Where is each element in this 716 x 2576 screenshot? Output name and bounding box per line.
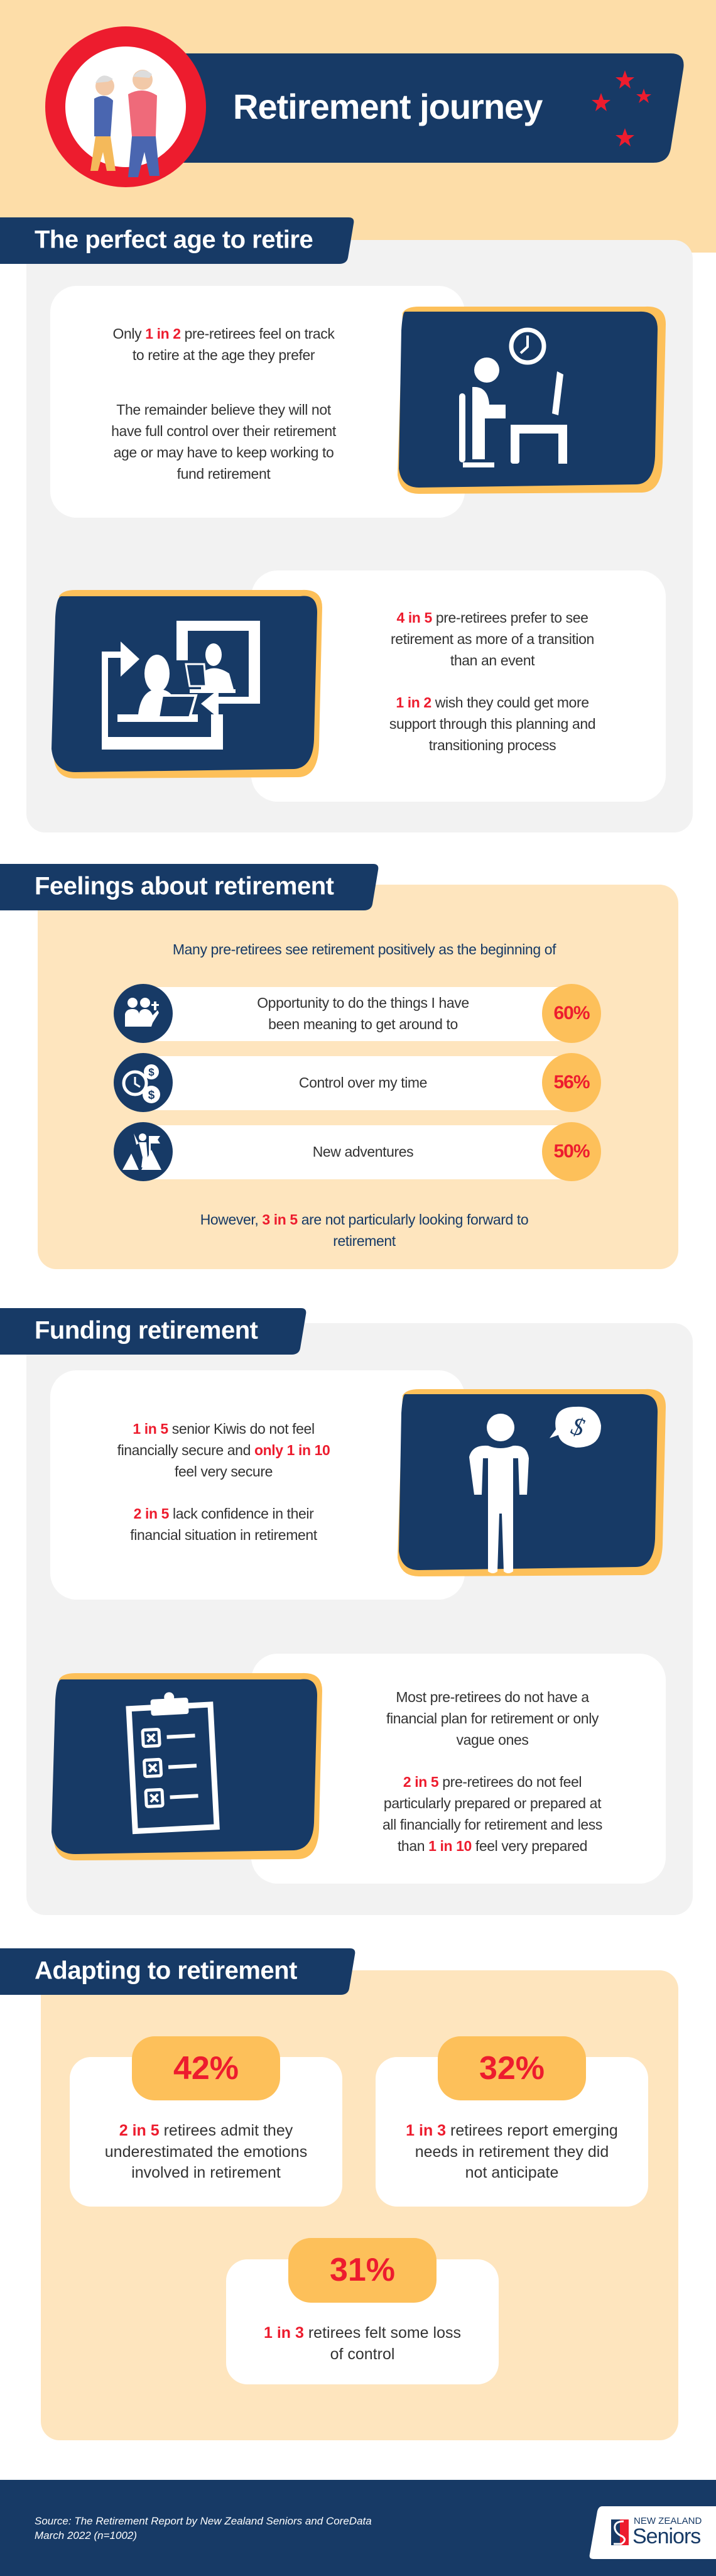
- icon: couple walking in red ring: [45, 26, 206, 187]
- text: remainder: fund retirement: [177, 466, 270, 482]
- text: remainder: The remainder believe they will not: [116, 401, 331, 418]
- panel: the perfect age to retire: [26, 240, 693, 832]
- text: 2 in 5 not prepared: [382, 1774, 602, 1854]
- heading: feelings about retirement: Feelings about retirement: [35, 873, 334, 900]
- icon: person with empty pockets: [398, 1389, 666, 1576]
- text: opportunity: Opportunity to do the things I have: [257, 995, 469, 1011]
- badge: 42%: [132, 2036, 280, 2100]
- card: 31% loss of control: [226, 2238, 499, 2384]
- text: most pre-retirees: Most pre-retirees do not have a: [396, 1689, 589, 1705]
- panel: adapting to retirement: [41, 1970, 678, 2440]
- text: 2 in 5 lack confidence: [130, 1505, 317, 1543]
- badge: 60%: [542, 984, 601, 1043]
- text: opportunity: been meaning to get around to: [268, 1016, 458, 1032]
- text: 1 in 3 emerging needs: [406, 2122, 618, 2181]
- text: transition: than an event: [450, 652, 534, 669]
- text: on track: [113, 325, 335, 363]
- badge: 50%: 50%: [553, 1141, 590, 1162]
- card: 42% emotions: [70, 2036, 342, 2207]
- text: support: transitioning process: [429, 737, 556, 753]
- logo: new zealand seniors: [589, 2506, 716, 2559]
- card: financial plan: [251, 1654, 666, 1884]
- heading: adapting to retirement: [0, 1948, 355, 1995]
- text: new adventures: New adventures: [313, 1143, 413, 1160]
- badge: 42%: 42%: [173, 2050, 239, 2087]
- icon: clock and coins: $: [148, 1089, 155, 1102]
- text: 1 in 3 emerging needs: needs in retirement they did: [415, 2142, 609, 2160]
- row: opportunity 60%: [114, 984, 601, 1043]
- text: transition: [391, 609, 594, 669]
- badge: 31%: [288, 2238, 437, 2303]
- text: support: 1 in 2 wish they could get more: [396, 694, 589, 711]
- text: 1 in 5: feel very secure: [175, 1463, 273, 1480]
- footer: [0, 2480, 716, 2576]
- icon: people: [114, 984, 173, 1043]
- icon: clock and coins: $: [148, 1066, 155, 1078]
- text: most pre-retirees: financial plan for retirement or only: [386, 1710, 599, 1727]
- icon: stars: [592, 70, 651, 146]
- badge: 50%: [542, 1122, 601, 1181]
- logo: new zealand seniors: NEW ZEALAND: [634, 2516, 702, 2526]
- text: 1 in 3 loss of control: 1 in 3 retirees felt some loss: [264, 2324, 461, 2342]
- badge: 56%: [542, 1053, 601, 1112]
- icon: two people with laptops and arrows: [52, 589, 322, 778]
- text: remainder: [111, 401, 337, 482]
- text: source: Source: The Retirement Report by New Zealand Seniors and CoreData: [35, 2515, 372, 2527]
- text: 2 in 5 lack confidence: financial situation in retirement: [130, 1527, 317, 1543]
- text: however 3 in 5: However, 3 in 5 are not particularly looking forward to: [200, 1211, 528, 1228]
- text: 2 in 5 underestimated: underestimated the emotions: [105, 2142, 307, 2160]
- text: 2 in 5 underestimated: [105, 2122, 307, 2181]
- badge: 32%: [438, 2036, 586, 2100]
- text: 1 in 3 loss of control: [264, 2324, 461, 2362]
- panel: feelings about retirement: [38, 885, 678, 1269]
- icon: climber with flag: [114, 1122, 173, 1181]
- heading: adapting to retirement: Adapting to retirement: [35, 1957, 297, 1985]
- text: 1 in 3 loss of control: of control: [330, 2345, 394, 2362]
- text: on track: to retire at the age they prefer: [133, 347, 315, 363]
- text: remainder: age or may have to keep working to: [114, 444, 334, 461]
- text: support: [389, 694, 595, 753]
- icon: clock and coins: [114, 1053, 173, 1112]
- heading: funding retirement: [0, 1308, 306, 1355]
- logo: new zealand seniors: Seniors: [632, 2524, 700, 2548]
- icon: clipboard checklist: [52, 1673, 322, 1860]
- text: 1 in 5: [117, 1421, 330, 1480]
- text: most pre-retirees: vague ones: [457, 1732, 528, 1748]
- text: 2 in 5 underestimated: 2 in 5 retirees admit they: [119, 2122, 293, 2139]
- badge: 56%: 56%: [553, 1072, 590, 1093]
- icon: person at desk: [398, 307, 666, 494]
- text: 2 in 5 lack confidence: 2 in 5 lack confidence in their: [134, 1505, 313, 1522]
- heading: the perfect age to retire: [0, 217, 354, 264]
- icon: person with empty pockets: $: [568, 1411, 588, 1442]
- text: remainder: have full control over their retirement: [111, 423, 336, 439]
- text: 1 in 3 emerging needs: not anticipate: [465, 2164, 558, 2181]
- text: 2 in 5 not prepared: than 1 in 10 feel very prepared: [398, 1838, 587, 1854]
- text: 2 in 5 not prepared: 2 in 5 pre-retirees do not feel: [403, 1774, 582, 1790]
- text: 1 in 3 emerging needs: 1 in 3 retirees report emerging: [406, 2122, 618, 2139]
- card: transition: [251, 570, 666, 802]
- text: on track: Only 1 in 2 pre-retirees feel on track: [113, 325, 334, 342]
- title banner: [45, 26, 684, 187]
- heading: the perfect age to retire: The perfect age to retire: [35, 226, 313, 254]
- card: on track: [50, 286, 465, 518]
- text: most pre-retirees: [386, 1689, 599, 1748]
- text: 2 in 5 underestimated: involved in retirement: [131, 2164, 281, 2181]
- badge: 31%: 31%: [330, 2252, 395, 2288]
- heading: funding retirement: Funding retirement: [35, 1317, 258, 1345]
- text: source: March 2022 (n=1002): [35, 2530, 137, 2541]
- card: 32% emerging needs: [376, 2036, 648, 2207]
- title: Retirement journey: [233, 87, 542, 126]
- card: financial security: [50, 1370, 465, 1600]
- panel: funding retirement: [26, 1323, 693, 1915]
- text: 2 in 5 not prepared: particularly prepared or prepared at: [384, 1795, 601, 1811]
- text: intro: Many pre-retirees see retirement positively as the beginning of: [173, 941, 556, 958]
- row: new adventures 50%: [114, 1122, 601, 1181]
- text: source: [35, 2515, 372, 2541]
- text: transition: 4 in 5 pre-retirees prefer to see: [396, 609, 589, 626]
- text: control over my time: Control over my time: [299, 1074, 427, 1091]
- text: opportunity: [257, 995, 469, 1032]
- text: support: support through this planning and: [389, 716, 595, 732]
- text: however 3 in 5: [200, 1211, 528, 1249]
- heading: feelings about retirement: [0, 864, 378, 910]
- badge: 32%: 32%: [479, 2050, 545, 2087]
- header background: [0, 0, 716, 253]
- text: transition: retirement as more of a transition: [391, 631, 594, 647]
- text: 2 in 5 not prepared: all financially for retirement and less: [382, 1816, 602, 1833]
- badge: 60%: 60%: [553, 1003, 590, 1023]
- text: 1 in 5: financially secure and only 1 in 10: [117, 1442, 330, 1458]
- row: control over my time 56%: [114, 1053, 601, 1112]
- text: 1 in 5: 1 in 5 senior Kiwis do not feel: [133, 1421, 315, 1437]
- text: however 3 in 5: retirement: [333, 1233, 396, 1249]
